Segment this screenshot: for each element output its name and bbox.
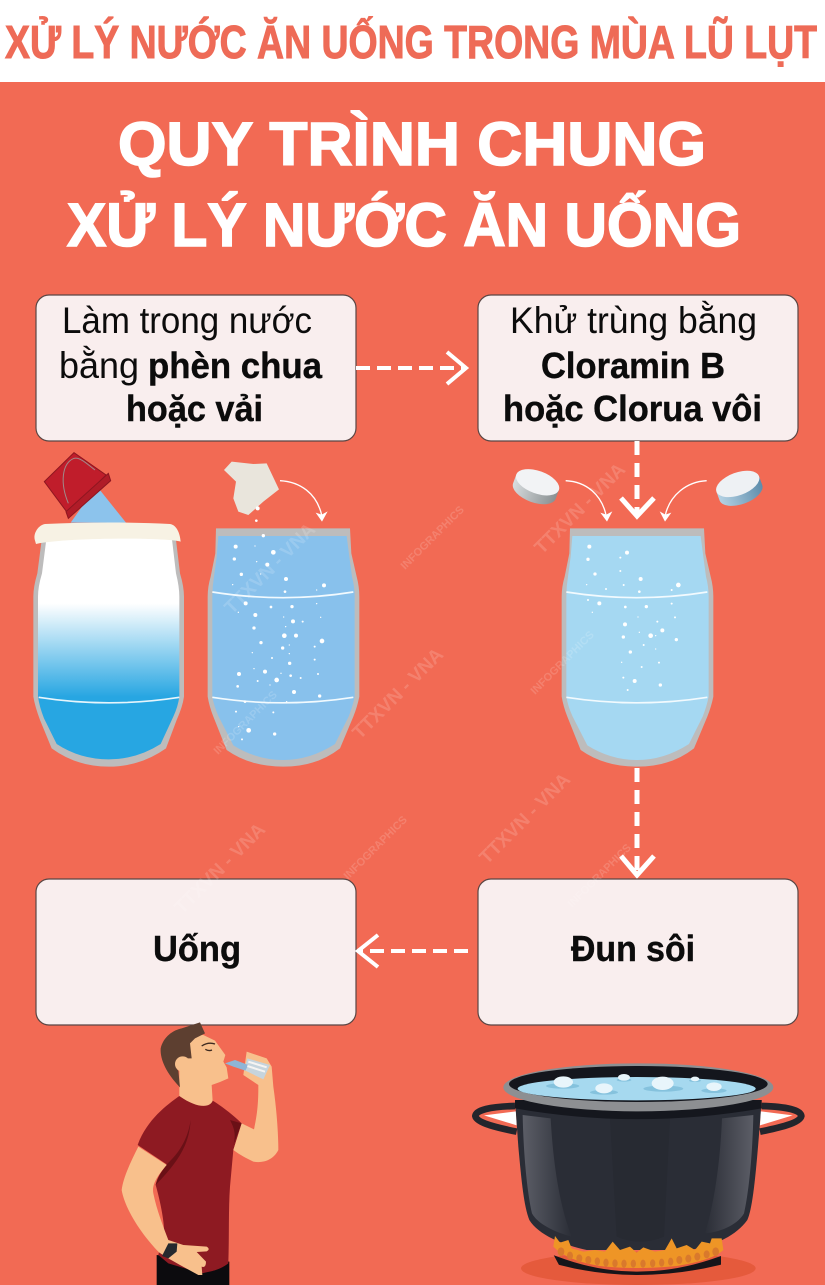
arrow: clarify to disinfect [356,352,466,384]
icon: red bucket [44,453,111,518]
pot body [515,1100,762,1250]
main heading: QUY TRÌNH CHUNG [118,110,706,178]
eye and brow [202,1043,215,1051]
arrow: barrel to boil [621,768,654,875]
top banner title [0,0,825,82]
burner [557,1258,719,1273]
alum particles [232,506,326,740]
step box: disinfect: hoặc Clorua vôi [503,388,762,429]
watermarks [171,459,634,919]
watermarks: TTXVN - VNA [171,819,270,919]
glass [244,1058,270,1079]
watermarks: INFOGRAPHICS [212,689,280,757]
step box: boil [478,879,798,1025]
watermarks: TTXVN - VNA [476,769,575,869]
barrel: water with alum [208,506,359,767]
step box: clarify water: bằng [59,345,139,386]
step box: clarify water: Làm trong nước [62,300,312,341]
arrow: disinfect to barrel [621,441,654,516]
main heading: XỬ LÝ NƯỚC ĂN UỐNG [67,191,741,259]
step box: boil: Đun sôi [571,928,695,969]
main heading [67,110,741,259]
step box: drink: Uống [153,928,241,969]
step box: disinfect: Cloramin B [541,345,725,386]
step box: clarify water: hoặc vải [126,388,263,429]
right arm [233,1052,278,1162]
illustration: boiling pot on stove [475,1063,801,1285]
illustration: man drinking water [122,1022,278,1285]
neck and face [178,1033,228,1107]
flames [553,1236,723,1268]
bubbles [546,1074,727,1095]
hair [161,1022,205,1087]
shirt [138,1096,242,1273]
water stream from bucket [71,486,126,523]
step box: clarify water [36,295,356,441]
watermarks: TTXVN - VNA [531,459,630,559]
step box: drink [36,879,356,1025]
curved arrow: alum into barrel [280,481,328,522]
watch [162,1243,177,1258]
icon: right tablet [713,466,766,511]
boiling water [518,1077,756,1100]
barrel: settling water with cloth and bucket [33,453,184,767]
handles [475,1106,517,1132]
step box: disinfect [478,295,798,441]
icon: alum rock [224,462,279,515]
left arm and hand [122,1147,209,1275]
trousers [157,1255,229,1285]
barrel: water with chloramine [562,528,713,767]
watermarks: INFOGRAPHICS [399,504,467,572]
stove shadow [521,1252,756,1285]
rim [503,1063,773,1111]
ear [175,1056,190,1072]
watermarks: INFOGRAPHICS [529,629,597,697]
step box: disinfect: Khử trùng bằng [510,300,757,341]
dissolved particles [586,545,681,691]
watermarks: INFOGRAPHICS [566,842,634,910]
watermarks: TTXVN - VNA [221,519,320,619]
cloth cover [34,522,181,544]
curved arrows: tablets into barrel [566,481,707,522]
watermarks: INFOGRAPHICS [342,814,410,882]
icon: left tablet [509,464,563,509]
arrow: boil to drink [358,935,468,967]
step box: clarify water: phèn chua [148,345,323,386]
watermarks: TTXVN - VNA [349,644,448,744]
